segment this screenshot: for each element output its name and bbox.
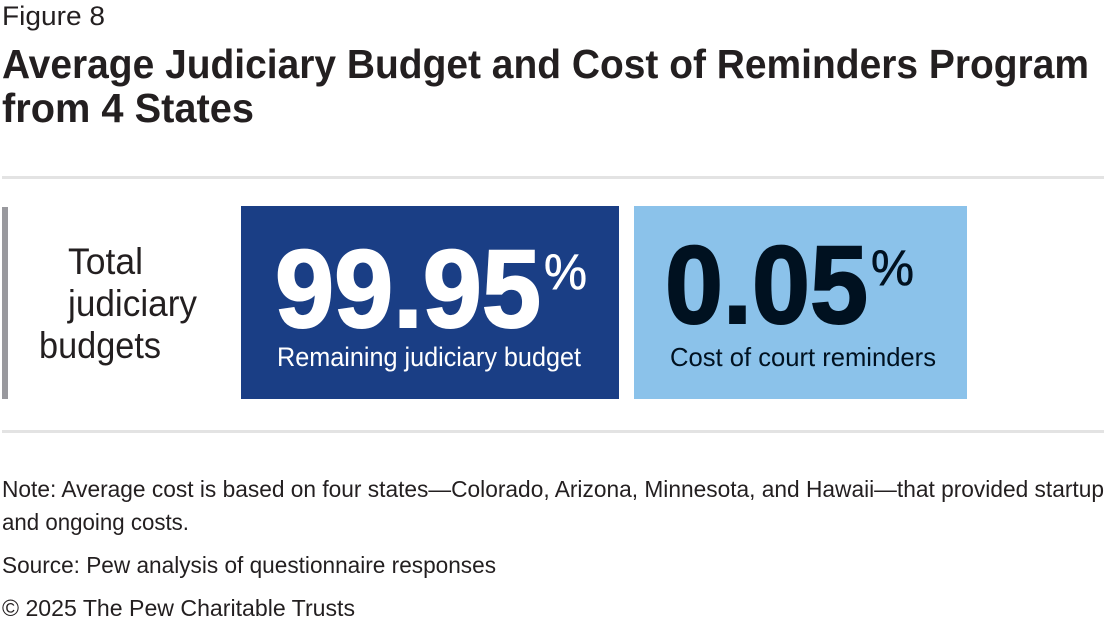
note: [2, 476, 1104, 535]
percent sign: %: [544, 244, 587, 300]
title: from 4 States: [2, 85, 254, 131]
stat 0.05%: 0.05: [665, 224, 868, 347]
panel: remaining budget: [241, 206, 619, 399]
note: and ongoing costs.: [2, 509, 189, 535]
row label text: budgets: [39, 325, 161, 366]
row label text: judiciary: [67, 283, 197, 324]
title: [2, 41, 1089, 131]
row label text: Total: [68, 241, 143, 282]
panel: cost of reminders: [634, 206, 967, 399]
source: Source: Pew analysis of questionnaire responses: [2, 552, 496, 578]
stat 99.95%: 99.95: [275, 228, 541, 351]
grey vertical bar: [2, 207, 8, 399]
panel: total judiciary budgets label: [2, 207, 197, 399]
caption: Cost of court reminders: [670, 342, 936, 372]
note: Note: Average cost is based on four states—Colorado, Arizona, Minnesota, and Hawaii—that provided startup: [2, 476, 1104, 502]
caption: Remaining judiciary budget: [277, 342, 581, 372]
figure label: Figure 8: [2, 1, 105, 31]
percent sign: %: [871, 240, 914, 296]
row label text: [39, 241, 197, 366]
